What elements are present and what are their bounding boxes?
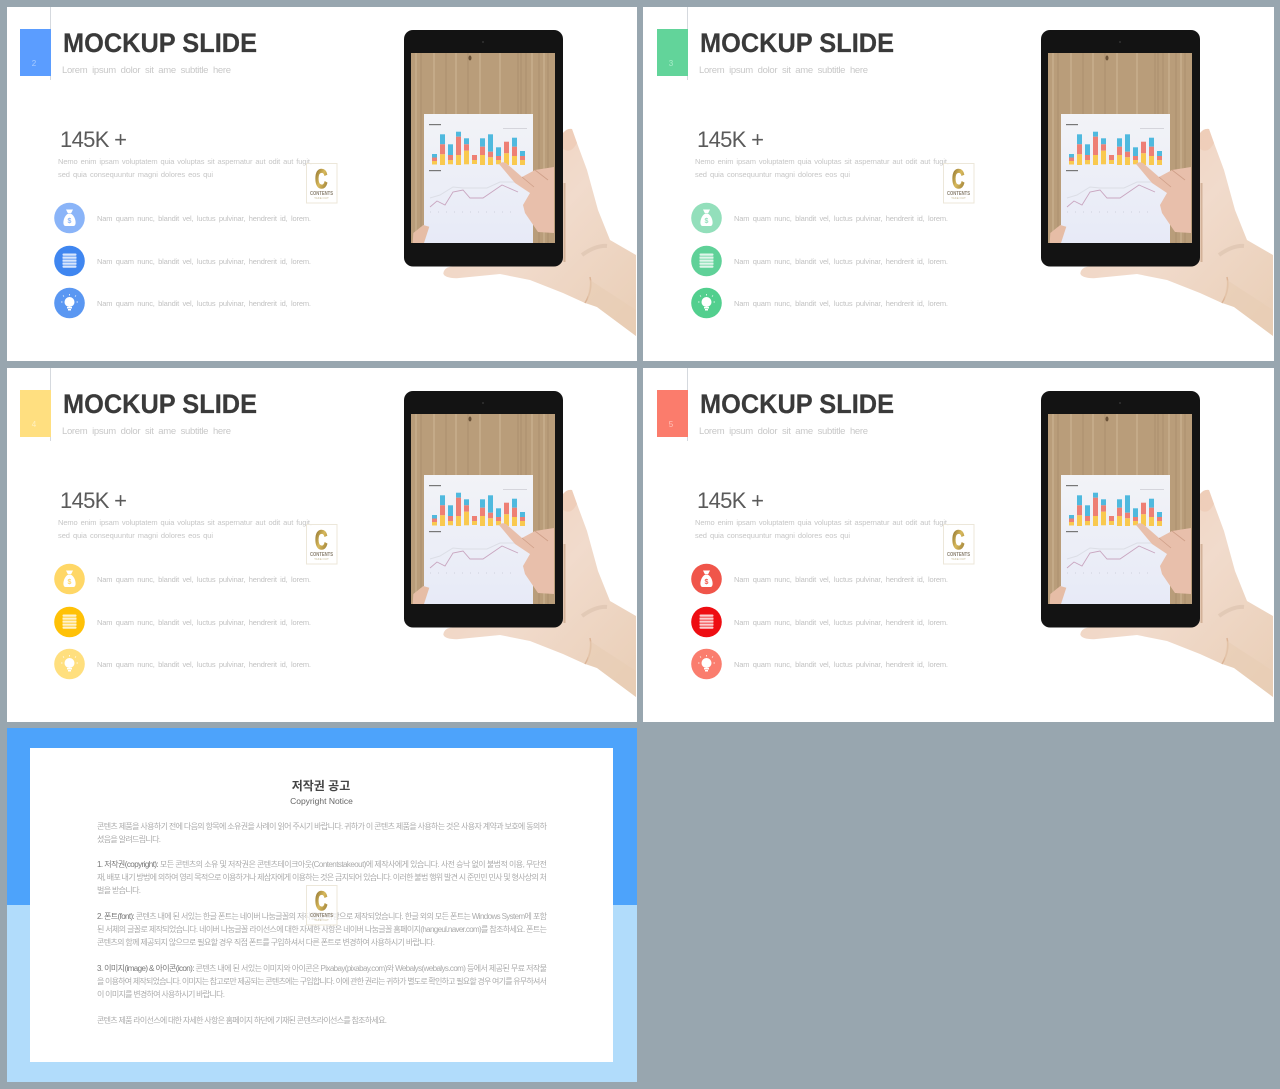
stat figure: 145K + bbox=[60, 488, 127, 513]
watermark stamp: C bbox=[315, 164, 328, 194]
description: sed quia consequuntur magni dolores eos qui bbox=[695, 170, 850, 179]
notice subtitle: Copyright Notice bbox=[290, 796, 353, 806]
watermark stamp: CONTENTS bbox=[310, 913, 334, 919]
icon: light bulb bbox=[54, 649, 85, 679]
heading: MOCKUP SLIDE bbox=[700, 28, 894, 58]
heading: MOCKUP SLIDE bbox=[63, 389, 257, 419]
icon: coin stack bbox=[54, 246, 85, 276]
stat figure: 145K + bbox=[60, 127, 127, 152]
icon: coin stack bbox=[691, 246, 722, 276]
description: sed quia consequuntur magni dolores eos qui bbox=[695, 531, 850, 540]
stat figure: 145K + bbox=[697, 127, 764, 152]
number tab: 4 bbox=[32, 420, 37, 429]
description bbox=[695, 518, 949, 540]
closing line: 콘텐츠 제품 라이선스에 대한 자세한 사항은 홈페이지 하단에 기재된 콘텐츠라이선스를 참조하세요. bbox=[97, 1015, 387, 1025]
watermark stamp: C bbox=[952, 164, 964, 194]
icon: money bag: $ bbox=[705, 218, 709, 225]
icon: light bulb bbox=[691, 288, 722, 318]
stat figure: 145K + bbox=[697, 488, 764, 513]
panel: blue mockup slide bbox=[7, 7, 637, 361]
icon: money bag: $ bbox=[68, 218, 72, 225]
icon: money bag bbox=[54, 203, 85, 233]
list text 2: Nam quam nunc, blandit vel, luctus pulvinar, hendrerit id, lorem. bbox=[734, 257, 948, 266]
notice title: 저작권 공고 bbox=[292, 778, 350, 793]
number tab bbox=[657, 29, 688, 76]
number tab bbox=[20, 29, 51, 76]
icon: coin stack bbox=[54, 607, 85, 637]
tablet in hand bbox=[1041, 30, 1273, 336]
watermark stamp bbox=[306, 164, 337, 203]
list text 2: Nam quam nunc, blandit vel, luctus pulvinar, hendrerit id, lorem. bbox=[97, 618, 311, 627]
panel: green mockup slide bbox=[643, 7, 1274, 361]
heading: MOCKUP SLIDE bbox=[63, 28, 257, 58]
watermark stamp: TAKE OUT bbox=[314, 918, 329, 922]
tablet in hand bbox=[404, 391, 636, 697]
description: Nemo enim ipsam voluptatem quia voluptas sit aspernatur aut odit aut fugit, bbox=[58, 518, 312, 527]
tablet in hand bbox=[404, 30, 636, 336]
list text 1: Nam quam nunc, blandit vel, luctus pulvinar, hendrerit id, lorem. bbox=[734, 214, 948, 223]
heading: MOCKUP SLIDE bbox=[700, 389, 894, 419]
section 3: image and icon: 을 이용하여 제작되었습니다. 이미지는 참고로만 제공되는 콘텐츠에는 구입합니다. 이에 관한 권리는 귀하가 별도로 확인하고 필요할 경우 여기를 유무하셔서 bbox=[97, 976, 547, 986]
watermark stamp: CONTENTS bbox=[947, 191, 971, 197]
description: Nemo enim ipsam voluptatem quia voluptas sit aspernatur aut odit aut fugit, bbox=[695, 518, 949, 527]
description bbox=[58, 518, 312, 540]
list text 2: Nam quam nunc, blandit vel, luctus pulvinar, hendrerit id, lorem. bbox=[97, 257, 311, 266]
section 2: font bbox=[97, 911, 548, 947]
description bbox=[695, 157, 949, 179]
icon: light bulb bbox=[54, 288, 85, 318]
watermark stamp: CONTENTS bbox=[310, 191, 334, 197]
description: sed quia consequuntur magni dolores eos qui bbox=[58, 531, 213, 540]
icon: money bag: $ bbox=[68, 579, 72, 586]
number tab: 3 bbox=[669, 59, 674, 68]
section 2: font: 2. 폰트(font): 콘텐츠 내에 된 서있는 한글 폰트는 네이버 나눔글꼴의 저작물을 바탕으로 제작되었습니다. 한글 외의 모든 폰트는 Windows System에 포함 bbox=[97, 911, 548, 921]
subtitle: Lorem ipsum dolor sit ame subtitle here bbox=[699, 426, 868, 437]
number tab: 5 bbox=[669, 420, 674, 429]
list text 3: Nam quam nunc, blandit vel, luctus pulvinar, hendrerit id, lorem. bbox=[97, 660, 311, 669]
icon: money bag: $ bbox=[705, 579, 709, 586]
watermark stamp bbox=[944, 524, 974, 564]
icon: money bag bbox=[691, 564, 722, 594]
watermark stamp: TAKE OUT bbox=[951, 557, 966, 561]
intro paragraph: 콘텐츠 제품을 사용하기 전에 다음의 항목에 소유권을 사례이 읽어 주시기 바랍니다. 귀하가 이 콘텐츠 제품을 사용하는 것은 사용자 계약과 보호에 동의하 bbox=[97, 821, 548, 831]
panel: yellow mockup slide bbox=[7, 368, 637, 722]
subtitle: Lorem ipsum dolor sit ame subtitle here bbox=[699, 65, 868, 76]
panel: red mockup slide bbox=[643, 368, 1274, 722]
list text 1: Nam quam nunc, blandit vel, luctus pulvinar, hendrerit id, lorem. bbox=[97, 214, 311, 223]
list text 1: Nam quam nunc, blandit vel, luctus pulvinar, hendrerit id, lorem. bbox=[734, 575, 948, 584]
description bbox=[58, 157, 312, 179]
watermark stamp: C bbox=[315, 525, 328, 555]
section 3: image and icon bbox=[97, 963, 547, 999]
list text 3: Nam quam nunc, blandit vel, luctus pulvinar, hendrerit id, lorem. bbox=[734, 299, 948, 308]
section 1: copyright bbox=[97, 859, 547, 895]
tablet in hand bbox=[1041, 391, 1273, 697]
panel: copyright notice slide bbox=[7, 728, 637, 1082]
watermark stamp: CONTENTS bbox=[310, 552, 334, 558]
description: sed quia consequuntur magni dolores eos qui bbox=[58, 170, 213, 179]
number tab: 2 bbox=[32, 59, 37, 68]
watermark stamp: TAKE OUT bbox=[951, 196, 966, 200]
watermark stamp: TAKE OUT bbox=[314, 557, 329, 561]
watermark stamp bbox=[306, 886, 337, 925]
watermark stamp bbox=[944, 164, 974, 203]
description: Nemo enim ipsam voluptatem quia voluptas sit aspernatur aut odit aut fugit, bbox=[58, 157, 312, 166]
icon: money bag bbox=[691, 203, 722, 233]
subtitle: Lorem ipsum dolor sit ame subtitle here bbox=[62, 426, 231, 437]
icon: money bag bbox=[54, 564, 85, 594]
section 1: copyright: 1. 저작권(copyright): 모든 콘텐츠의 소유 및 저작권은 콘텐츠테이크아웃(Contentstakeout)에 제작사에게 있습니다. 사전 승낙 없이 불법적 이용, 무단전 bbox=[97, 859, 547, 869]
number tab bbox=[20, 390, 51, 437]
icon: light bulb bbox=[691, 649, 722, 679]
section 3: image and icon: 3. 이미지(image) & 아이콘(icon): 콘텐츠 내에 된 서있는 이미지와 아이콘은 Pixabay(pixabay.com)와 Webalys(webalys.com) 등에서 제공된 무료 저작물 bbox=[97, 963, 547, 973]
section 1: copyright: 재, 배포 내기 방법에 의하여 영리 목적으로 이용하거나 제삼자에게 이용하는 것은 금지되어 있습니다. 이러한 불법 행위 발견 시 준민민 민사 및 형사상의 처 bbox=[97, 872, 547, 882]
list text 3: Nam quam nunc, blandit vel, luctus pulvinar, hendrerit id, lorem. bbox=[734, 660, 948, 669]
list text 2: Nam quam nunc, blandit vel, luctus pulvinar, hendrerit id, lorem. bbox=[734, 618, 948, 627]
list text 1: Nam quam nunc, blandit vel, luctus pulvinar, hendrerit id, lorem. bbox=[97, 575, 311, 584]
section 1: copyright: 벌을 받습니다. bbox=[97, 885, 141, 895]
intro paragraph bbox=[97, 821, 548, 844]
icon: coin stack bbox=[691, 607, 722, 637]
watermark stamp bbox=[306, 524, 337, 564]
watermark stamp: TAKE OUT bbox=[314, 196, 329, 200]
section 3: image and icon: 이 이미지를 변경하여 사용하시기 바랍니다. bbox=[97, 989, 225, 999]
description: Nemo enim ipsam voluptatem quia voluptas sit aspernatur aut odit aut fugit, bbox=[695, 157, 949, 166]
subtitle: Lorem ipsum dolor sit ame subtitle here bbox=[62, 65, 231, 76]
number tab bbox=[657, 390, 688, 437]
section 2: font: 된 서체의 글꼴로 제작되었습니다. 네이버 나눔글꼴 라이선스에 대한 자세한 사항은 네이버 나눔글꼴 홈페이지(hangeul.naver.com)를 참조하세요. 폰트는 bbox=[97, 924, 547, 934]
list text 3: Nam quam nunc, blandit vel, luctus pulvinar, hendrerit id, lorem. bbox=[97, 299, 311, 308]
section 2: font: 콘텐츠의 함께 제공되지 않으므로 필요할 경우 직접 폰트를 구입하셔서 다른 폰트로 변경하여 사용하시기 바랍니다. bbox=[97, 937, 435, 947]
watermark stamp: C bbox=[952, 525, 964, 555]
watermark stamp: CONTENTS bbox=[947, 552, 971, 558]
watermark stamp: C bbox=[315, 886, 328, 916]
intro paragraph: 셨음을 알려드립니다. bbox=[97, 834, 161, 844]
